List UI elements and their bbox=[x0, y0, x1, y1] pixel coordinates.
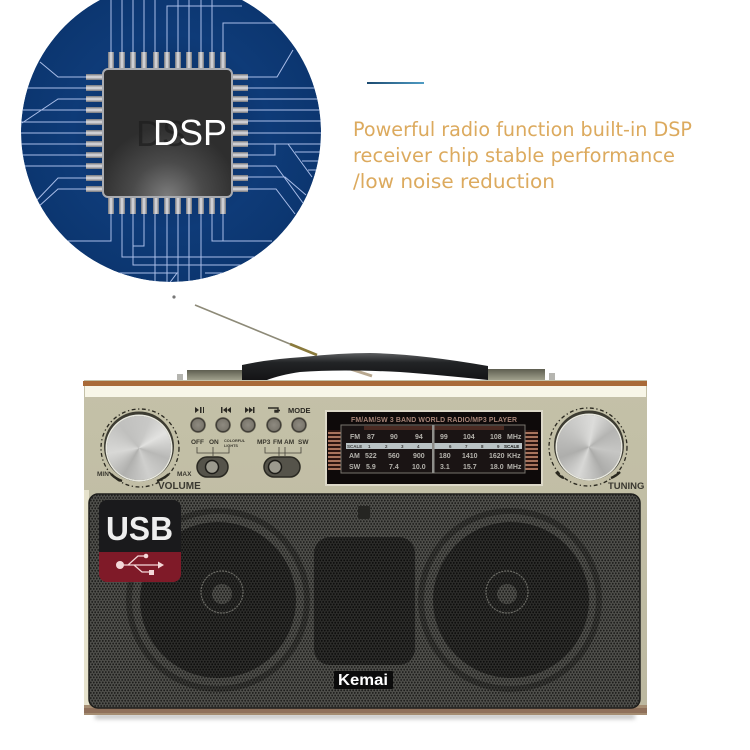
chip pins right bbox=[232, 74, 248, 192]
SW row: 3.1 bbox=[440, 464, 450, 471]
switch labels bbox=[191, 439, 309, 448]
FM row: 104 bbox=[463, 434, 475, 441]
left edge highlight bbox=[84, 490, 89, 705]
cream highlight strip bbox=[85, 386, 646, 397]
scale numbers row: 8 bbox=[481, 444, 484, 449]
light switch bbox=[197, 457, 228, 477]
chip body bbox=[103, 69, 232, 197]
chip pins left bbox=[86, 74, 103, 192]
speaker grille bbox=[89, 494, 640, 708]
center panel bbox=[314, 537, 415, 665]
tuning scale panel bbox=[326, 411, 542, 485]
tuning needle bbox=[432, 425, 434, 473]
SW row: MHz bbox=[507, 464, 522, 471]
FM row: 90 bbox=[390, 434, 398, 441]
scale numbers row: 1 bbox=[368, 444, 371, 449]
volume dial markings bbox=[101, 409, 179, 487]
radio shadow bbox=[95, 714, 635, 719]
scale frame bbox=[341, 425, 525, 473]
SW row: 18.0 bbox=[490, 464, 504, 471]
button icons bbox=[195, 406, 310, 415]
switch labels: MP3 bbox=[257, 439, 271, 446]
description text: receiver chip stable performance bbox=[353, 144, 675, 167]
switch brackets bbox=[197, 447, 301, 456]
AM row: 900 bbox=[413, 453, 425, 460]
DSP label: DSP bbox=[153, 112, 227, 153]
lower wood trim bbox=[84, 700, 647, 715]
volume labels bbox=[97, 471, 201, 492]
SW row: 5.9 bbox=[366, 464, 376, 471]
switch labels: COLORFUL bbox=[224, 439, 246, 443]
scale numbers row: 4 bbox=[417, 444, 420, 449]
FM row: 94 bbox=[415, 434, 423, 441]
SW row bbox=[349, 464, 522, 471]
tuning knob bbox=[557, 415, 621, 479]
switch labels: AM bbox=[284, 439, 294, 446]
tuning dial markings bbox=[549, 408, 627, 486]
handle with end caps bbox=[177, 353, 555, 380]
AM row: 180 bbox=[439, 453, 451, 460]
icon: usb symbol bbox=[116, 554, 164, 575]
FM row: FM bbox=[350, 434, 360, 441]
switch labels: FM bbox=[273, 439, 282, 446]
FM row: 108 bbox=[490, 434, 502, 441]
FM row: 87 bbox=[367, 434, 375, 441]
SW row: 10.0 bbox=[412, 464, 426, 471]
DSP chip illustration bbox=[20, 0, 322, 290]
AM row: 1410 bbox=[462, 453, 478, 460]
small sensor window bbox=[358, 506, 370, 519]
volume knob bbox=[107, 416, 171, 480]
AM row: 1620 bbox=[489, 453, 505, 460]
left speaker bbox=[126, 508, 310, 692]
circuit traces bbox=[20, 0, 322, 290]
switch labels: SW bbox=[298, 439, 309, 446]
FM row bbox=[350, 434, 522, 441]
switch labels: ON bbox=[209, 439, 219, 446]
right speaker bbox=[418, 508, 602, 692]
AM row: KHz bbox=[507, 453, 521, 460]
scale numbers row: SCALE bbox=[504, 444, 519, 449]
SW row: 15.7 bbox=[463, 464, 477, 471]
AM row: 560 bbox=[388, 453, 400, 460]
FM row: 99 bbox=[440, 434, 448, 441]
antenna bbox=[172, 295, 372, 376]
scale stripes left bbox=[328, 430, 341, 470]
tuning label: TUNING bbox=[608, 481, 644, 492]
description text: Powerful radio function built-in DSP bbox=[353, 118, 692, 141]
button icons: MODE bbox=[288, 406, 310, 415]
SW row: SW bbox=[349, 464, 361, 471]
scale numbers row: 6 bbox=[449, 444, 452, 449]
scale numbers row: 9 bbox=[497, 444, 500, 449]
volume labels: MAX bbox=[177, 471, 192, 478]
scale title: FM/AM/SW 3 BAND WORLD RADIO/MP3 PLAYER bbox=[351, 417, 517, 424]
chip pins top bbox=[108, 52, 226, 69]
red ticks bbox=[364, 426, 504, 430]
scale numbers row: 7 bbox=[465, 444, 468, 449]
description text bbox=[353, 118, 692, 193]
switch labels: OFF bbox=[191, 439, 204, 446]
USB badge bbox=[99, 500, 181, 582]
scale numbers row bbox=[347, 444, 519, 449]
Kemai logo badge: Kemai bbox=[338, 672, 388, 689]
band switch bbox=[264, 457, 300, 477]
scale stripes right bbox=[525, 430, 538, 470]
top wood trim bbox=[83, 381, 647, 386]
scale numbers row: 2 bbox=[385, 444, 388, 449]
description text: /low noise reduction bbox=[353, 170, 555, 193]
volume labels: VOLUME bbox=[158, 481, 201, 492]
SCALE bar bbox=[346, 443, 522, 449]
chip pins bottom bbox=[108, 197, 226, 214]
switch labels: LIGHTS bbox=[224, 444, 238, 448]
accent rule bbox=[367, 82, 424, 84]
radio body bbox=[83, 380, 647, 715]
scale numbers row: 3 bbox=[401, 444, 404, 449]
AM row: 522 bbox=[365, 453, 377, 460]
AM row bbox=[349, 453, 521, 460]
blue circuit board disc bbox=[21, 0, 321, 282]
SW row: 7.4 bbox=[389, 464, 399, 471]
transport buttons bbox=[190, 417, 307, 433]
AM row: AM bbox=[349, 453, 360, 460]
volume labels: MIN bbox=[97, 471, 109, 478]
USB label: USB bbox=[106, 510, 173, 547]
FM row: MHz bbox=[507, 434, 522, 441]
ghost DSP lettering: DS bbox=[136, 113, 186, 154]
scale numbers row: SCALE bbox=[347, 444, 362, 449]
